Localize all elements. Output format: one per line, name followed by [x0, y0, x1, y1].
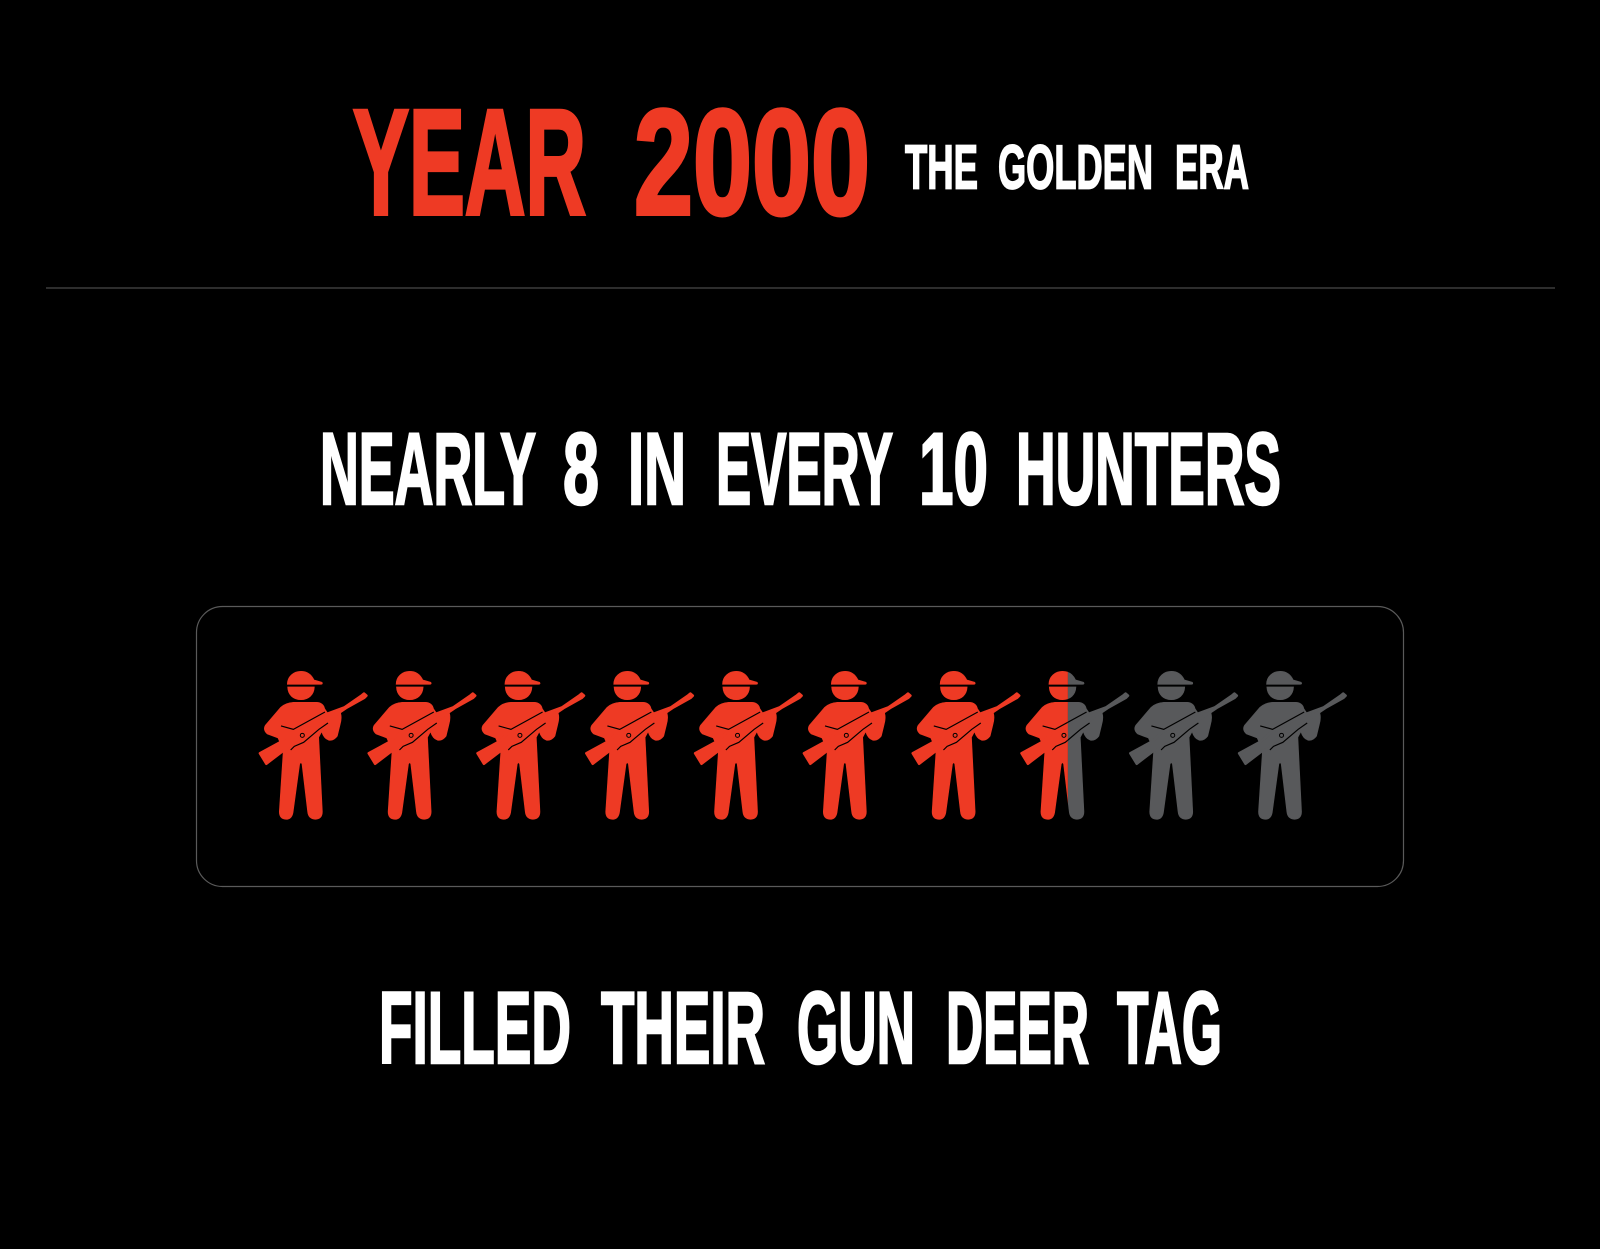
heading: nearly 8 in every 10 hunters: HUNTERS	[1016, 412, 1281, 526]
heading: nearly 8 in every 10 hunters	[320, 412, 1281, 526]
panel: hunter pictogram	[196, 606, 1404, 886]
pictogram: 7.5 of 10 hunters	[260, 671, 1346, 819]
heading: nearly 8 in every 10 hunters: EVERY	[716, 412, 893, 526]
title: year 2000: YEAR	[353, 78, 586, 246]
heading: filled their gun deer tag: TAG	[1117, 971, 1222, 1085]
heading: nearly 8 in every 10 hunters: IN	[628, 412, 686, 526]
subtitle: the golden era: THE	[905, 134, 978, 202]
subtitle: the golden era: GOLDEN	[998, 134, 1153, 202]
heading: nearly 8 in every 10 hunters: 8	[563, 412, 599, 526]
heading: nearly 8 in every 10 hunters: NEARLY	[320, 412, 536, 526]
heading: filled their gun deer tag: GUN	[797, 971, 915, 1085]
heading: filled their gun deer tag: FILLED	[379, 971, 571, 1085]
title: year 2000: 2000	[634, 78, 870, 246]
heading: filled their gun deer tag: DEER	[946, 971, 1089, 1085]
subtitle: the golden era: ERA	[1175, 134, 1249, 202]
heading: filled their gun deer tag: THEIR	[601, 971, 765, 1085]
heading: filled their gun deer tag	[379, 971, 1222, 1085]
heading: nearly 8 in every 10 hunters: 10	[919, 412, 988, 526]
